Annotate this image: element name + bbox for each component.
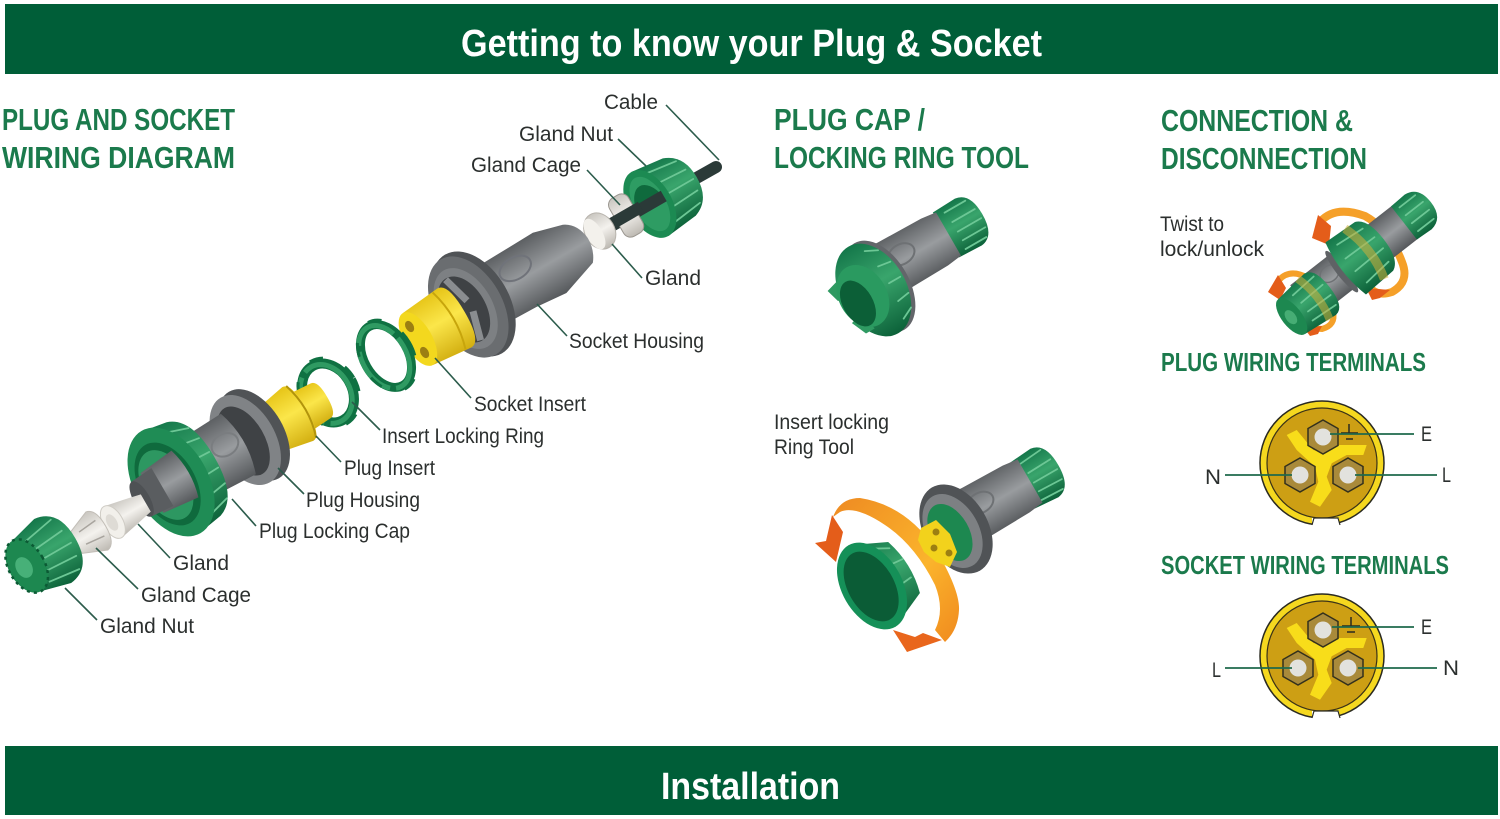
plug wiring terminal diagram: E	[1421, 423, 1432, 446]
socket wiring terminal diagram: E	[1421, 616, 1432, 639]
text: insert locking ring tool	[774, 411, 889, 459]
arrowheads	[815, 515, 843, 562]
heading: connection and disconnection: DISCONNECTION	[1161, 141, 1367, 176]
part labels: Gland	[645, 267, 701, 290]
part: left gland cage	[65, 507, 117, 562]
socket wiring terminal diagram	[1212, 594, 1459, 721]
part: right gland	[577, 207, 622, 255]
plug and socket body	[1283, 176, 1451, 328]
part labels: Plug Insert	[344, 457, 435, 480]
illustration: tool rotating on socket insert	[815, 441, 1072, 652]
part: insert locking ring (socket side)	[345, 310, 428, 401]
rear halves of twist arrows	[1320, 212, 1404, 294]
part: left gland nut	[0, 506, 94, 607]
top banner: Getting to know your Plug & Socket	[461, 23, 1042, 65]
part: right gland nut	[612, 145, 715, 247]
yellow socket face	[918, 520, 957, 567]
text: twist to lock/unlock: lock/unlock	[1160, 238, 1264, 261]
text: twist to lock/unlock	[1160, 213, 1264, 261]
live/neutral/earth bus	[1287, 430, 1367, 507]
text: insert locking ring tool: Ring Tool	[774, 436, 854, 459]
part labels: Socket Insert	[474, 393, 586, 416]
top banner	[5, 4, 1498, 74]
part: plug locking cap	[105, 406, 244, 554]
part: insert locking ring (plug side)	[286, 347, 372, 438]
terminal N	[1285, 458, 1315, 492]
illustration: plug cap with locking ring tool	[814, 191, 996, 353]
terminal E	[1308, 420, 1338, 454]
heading: plug wiring terminals: PLUG WIRING TERMINALS	[1161, 347, 1426, 377]
heading: plug cap / locking ring tool: PLUG CAP /	[774, 102, 925, 137]
part labels: Gland Cage	[471, 154, 581, 177]
part labels	[100, 91, 704, 638]
part labels: Gland Nut	[519, 123, 613, 146]
part labels: Plug Housing	[306, 489, 420, 512]
terminal L	[1333, 458, 1363, 492]
heading: plug cap / locking ring tool: LOCKING RING TOOL	[774, 140, 1029, 175]
heading: connection and disconnection: CONNECTION &	[1161, 103, 1353, 138]
heading: plug and socket wiring diagram: WIRING DIAGRAM	[2, 140, 235, 175]
part labels: Plug Locking Cap	[259, 520, 410, 543]
part: left gland	[95, 487, 155, 543]
heading: plug cap / locking ring tool	[774, 102, 1029, 175]
part labels: Gland Cage	[141, 584, 251, 607]
illustration: twist to lock	[1268, 176, 1451, 343]
bottom banner: Installation	[661, 766, 840, 808]
part labels: Gland	[173, 552, 229, 575]
part labels: Gland Nut	[100, 615, 194, 638]
socket wiring terminal diagram: N	[1443, 657, 1459, 680]
part labels: Socket Housing	[569, 330, 704, 353]
part labels: Insert Locking Ring	[382, 425, 544, 448]
leader lines	[65, 105, 719, 620]
heading: plug and socket wiring diagram	[2, 102, 235, 175]
exploded wiring diagram	[0, 91, 719, 638]
plug wiring terminal diagram: N	[1205, 466, 1221, 489]
part: plug insert	[260, 370, 343, 454]
heading: plug and socket wiring diagram: PLUG AND SOCKET	[2, 102, 235, 137]
bottom banner	[5, 746, 1498, 815]
plug wiring terminal diagram: L	[1442, 464, 1451, 487]
green tool cap	[823, 525, 931, 642]
plug wiring terminal diagram	[1205, 401, 1451, 528]
cable	[606, 167, 716, 229]
text: twist to lock/unlock: Twist to	[1160, 213, 1224, 236]
part: right gland cage	[597, 188, 652, 245]
part labels: Cable	[604, 91, 658, 114]
part: socket insert	[389, 283, 482, 375]
part: socket housing	[410, 189, 616, 373]
socket wiring terminal diagram: L	[1212, 659, 1221, 682]
earth symbol	[1341, 424, 1358, 439]
heading: connection and disconnection	[1161, 103, 1367, 176]
text: insert locking ring tool: Insert locking	[774, 411, 889, 434]
part: plug housing	[174, 377, 305, 510]
orange rotation arrow band	[833, 498, 959, 642]
